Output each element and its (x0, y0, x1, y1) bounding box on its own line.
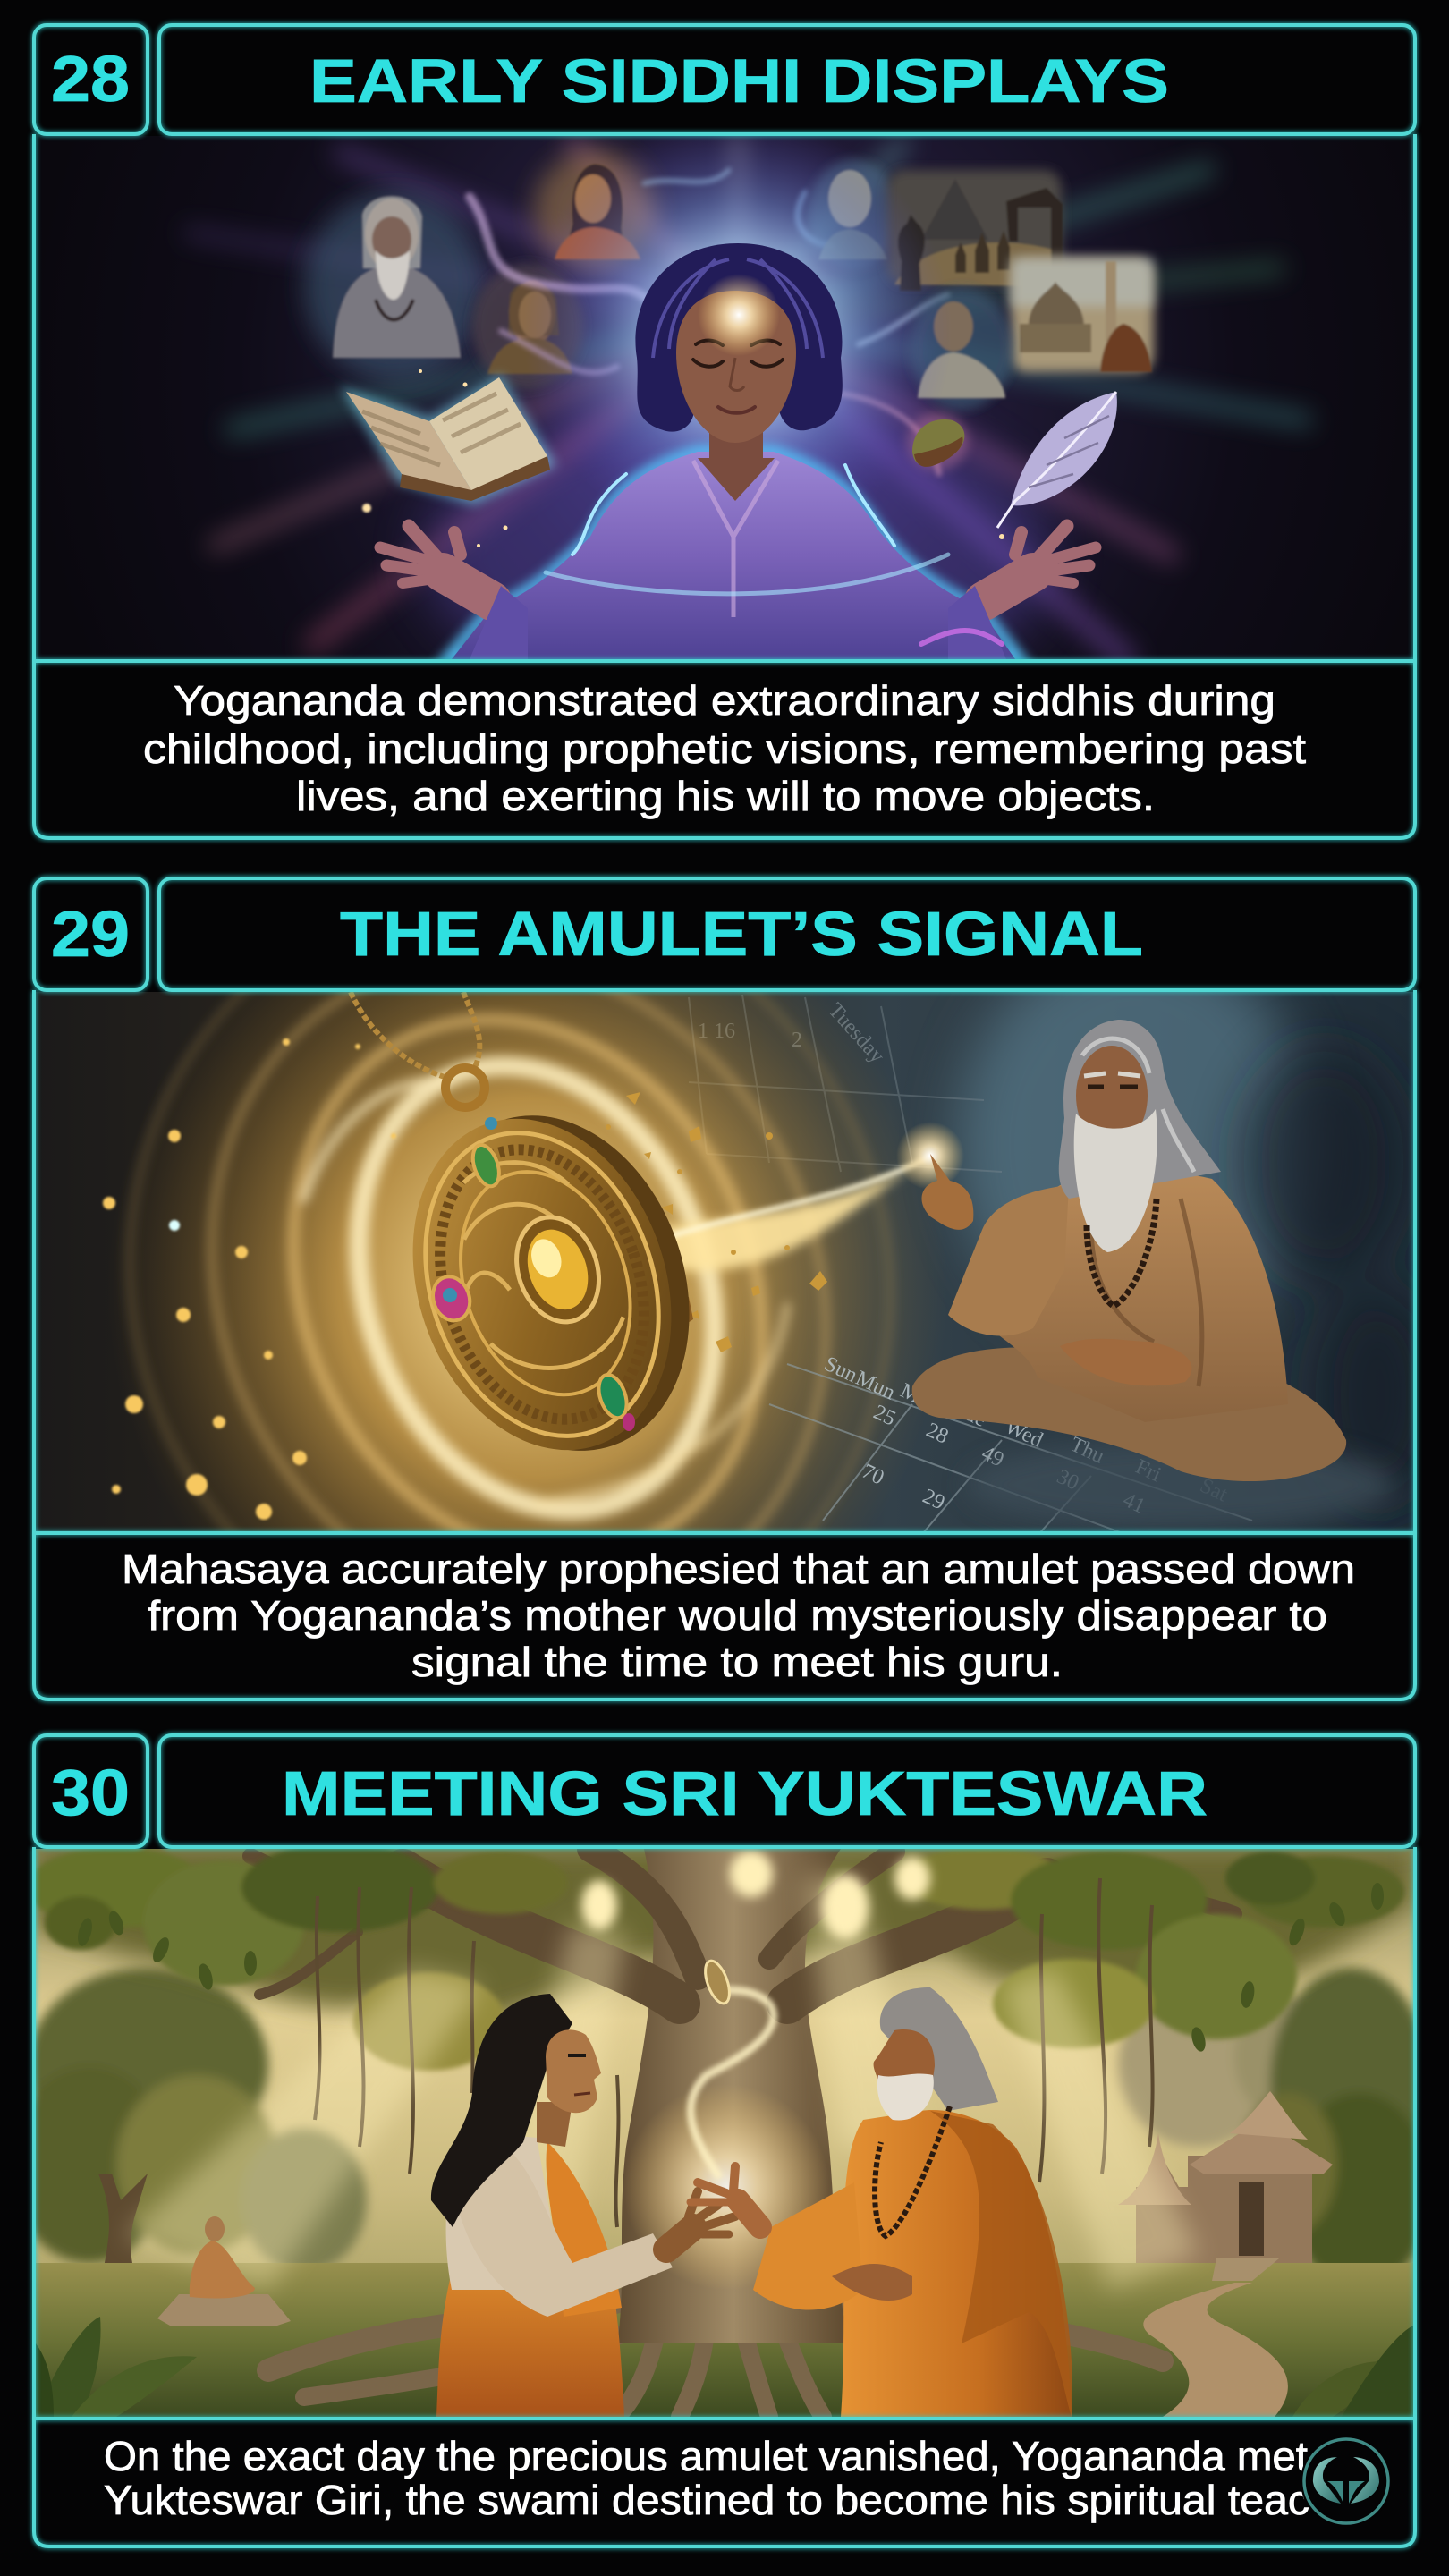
panel: the amulet's signal (0, 750, 1440, 1808)
upper calendar: 2 (792, 1029, 802, 1052)
outstretched sleeve (753, 2182, 863, 2309)
figure: meditating child (380, 243, 1096, 659)
closed eyes (693, 341, 783, 367)
vision: seated man (472, 264, 583, 389)
face (676, 291, 796, 443)
light particles (103, 1038, 396, 1520)
caption text: childhood, including prophetic visions, remembering past (143, 725, 1306, 772)
pointing sleeve (948, 1185, 1069, 1335)
caption text (143, 677, 1306, 819)
pointing hand (922, 1154, 973, 1230)
lower calendar: 41 (1119, 1488, 1148, 1519)
illustration: child with visions (38, 136, 1411, 659)
canopy mass (36, 1849, 1413, 2022)
robe body (975, 1170, 1288, 1422)
lower calendar: 28 (922, 1419, 952, 1449)
lower hands (1060, 1339, 1191, 1385)
caption text: On the exact day the precious amulet vanished, Yogananda met (104, 2433, 1308, 2479)
panel: meeting sri yukteswar (9, 1735, 1431, 2546)
third eye spark (698, 274, 780, 356)
caption text (122, 1546, 1355, 1685)
caption text: Yogananda demonstrated extraordinary siddhis during (174, 677, 1275, 724)
face (874, 2029, 935, 2097)
left tree trunk (98, 2174, 148, 2272)
lower calendar (769, 1352, 1252, 1565)
head glow (523, 116, 953, 546)
chain (351, 992, 479, 1078)
face (1076, 1046, 1148, 1146)
vision: swirling light ribbons (470, 170, 948, 474)
dark storm clouds (1243, 1046, 1440, 1503)
hair (1059, 1020, 1221, 1199)
light beam to finger (590, 1154, 932, 1275)
mist under sage (966, 1440, 1395, 1530)
golden vortex (36, 992, 1020, 1531)
frame: panel border (34, 25, 1415, 838)
floating book (340, 374, 556, 505)
panel: early siddhi displays (34, 25, 1415, 838)
logo badge (1301, 2436, 1392, 2527)
figure: Sri Yukteswar (691, 1987, 1072, 2417)
lower robe (436, 2263, 624, 2417)
crossed legs (912, 1347, 1346, 1481)
number 29: 29 (51, 899, 130, 970)
upper calendar: Tuesday (824, 999, 889, 1068)
left hand (380, 526, 492, 601)
lower calendar: Thu (1066, 1433, 1108, 1469)
vision: woman (534, 151, 656, 269)
caption text (104, 2433, 1309, 2523)
heading: early siddhi displays: EARLY SIDDHI DISPLAYS (309, 47, 1169, 115)
lower calendar: 25 (869, 1401, 899, 1431)
branches (250, 1849, 1234, 2004)
sun gaps in canopy (581, 1851, 930, 1939)
pendant bail (445, 1068, 485, 1107)
banyan trunk (617, 1849, 850, 2343)
energy swirl (691, 1990, 774, 2178)
canopy foliage (27, 1843, 1404, 2071)
lower calendar: 70 (858, 1460, 887, 1490)
prayer beads (1087, 1199, 1157, 1306)
number 28: 28 (51, 44, 130, 115)
lower calendar: Sun (820, 1352, 860, 1387)
sash (547, 2142, 622, 2317)
lower calendar: Mun (852, 1367, 899, 1405)
vision: old sage (304, 192, 483, 380)
vision: bald elder (808, 159, 901, 270)
illustration: amulet and prophet (0, 750, 1440, 1808)
vision: ancient landscape (887, 170, 1063, 291)
foreground plants (36, 2317, 1413, 2417)
body aura glow (402, 402, 1074, 648)
grass (36, 2263, 1413, 2417)
sleeve (452, 2147, 673, 2317)
caption text: lives, and exerting his will to move objects. (296, 773, 1155, 819)
mala beads (875, 2106, 950, 2236)
aerial roots (315, 1878, 1153, 2227)
frame: panel border (34, 878, 1415, 1699)
face (546, 2029, 601, 2113)
hair (880, 1987, 998, 2111)
neck (537, 2102, 572, 2147)
number 30: 30 (51, 1758, 130, 1829)
winding path (1143, 2283, 1288, 2417)
long robe (841, 2110, 1072, 2417)
body aura (447, 452, 1020, 659)
reaching hand (691, 2166, 760, 2227)
kurta embroidery (693, 461, 778, 617)
centre stone (503, 1206, 613, 1333)
caption text: Yukteswar Giri, the swami destined to become his spiritual teac (104, 2477, 1309, 2523)
illustration: meeting under banyan tree (9, 1843, 1431, 2417)
hair (635, 243, 843, 432)
sleeve cuffs (470, 586, 1006, 659)
leaves (75, 1883, 1384, 2053)
figure: seated sage (912, 1020, 1346, 1481)
lower calendar: Fri (1131, 1455, 1165, 1487)
lower calendar: Mon (896, 1379, 944, 1418)
caption text: Mahasaya accurately prophesied that an amulet passed down (122, 1546, 1355, 1592)
caption text: signal the time to meet his guru. (411, 1639, 1063, 1685)
light rays (188, 136, 1306, 659)
robe drape (930, 2111, 1072, 2417)
heading: the amulet's signal: THE AMULET’S SIGNAL (340, 899, 1143, 969)
floating feather (997, 392, 1117, 528)
kurta (452, 452, 1015, 659)
roots (268, 2299, 1163, 2417)
temple (1118, 2091, 1333, 2281)
lower calendar: Wed (1001, 1415, 1046, 1453)
vision: elder in turban (910, 288, 1013, 410)
distant trees (9, 1968, 1431, 2290)
long dark hair (431, 1994, 572, 2227)
figure: young Yogananda (431, 1994, 735, 2417)
energy arcs (546, 465, 1002, 644)
white shirt (446, 2137, 564, 2290)
upper calendar (689, 995, 1002, 1172)
lower calendar: 29 (919, 1485, 948, 1515)
upper calendar: 1 16 (698, 1020, 735, 1043)
lower calendar: Tue (950, 1397, 990, 1432)
vanishing amulet (700, 1958, 734, 2006)
white beard (877, 2074, 934, 2121)
frame: panel border (34, 1735, 1415, 2546)
vision: domed palace (1011, 258, 1154, 372)
caption text: from Yogananda’s mother would mysteriously disappear to (148, 1592, 1327, 1639)
right hand (984, 526, 1096, 601)
golden pendant (370, 1078, 733, 1490)
meditating statue (157, 2216, 291, 2326)
second hand (832, 2264, 912, 2301)
floating stone (907, 413, 968, 470)
lower calendar: 49 (978, 1442, 1007, 1472)
neck (709, 416, 763, 465)
dust fragments (606, 1092, 827, 1352)
gems small (443, 1117, 635, 1431)
lower calendar: Sat (1196, 1474, 1232, 1507)
sage halo (957, 939, 1315, 1351)
lower calendar: 30 (1053, 1465, 1082, 1496)
beard (1074, 1109, 1157, 1252)
sparkles (362, 369, 1004, 547)
heading: meeting sri yukteswar: MEETING SRI YUKTESWAR (282, 1758, 1208, 1828)
sun rays (125, 1878, 1199, 2290)
hand glow (623, 2084, 829, 2290)
open hand (666, 2191, 735, 2250)
gems (468, 1141, 504, 1190)
nose and lips (730, 358, 744, 390)
